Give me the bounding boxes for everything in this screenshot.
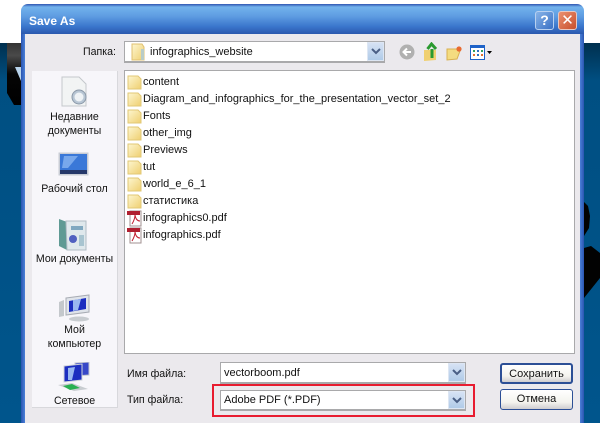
recent label: Недавние bbox=[50, 111, 99, 123]
background: black shape left bbox=[7, 43, 21, 105]
my computer label bbox=[48, 324, 101, 350]
help button bbox=[535, 11, 554, 30]
folder: fonts bbox=[128, 110, 171, 124]
red highlight box bbox=[212, 384, 475, 417]
recent label: документы bbox=[48, 124, 101, 136]
file name label: Имя файла: bbox=[127, 368, 186, 380]
window title: Save As bbox=[29, 14, 75, 28]
my computer label: Мой bbox=[64, 324, 85, 336]
file: infographics0.pdf bbox=[127, 210, 227, 226]
file type field bbox=[220, 390, 466, 411]
icon: new folder bbox=[447, 46, 462, 60]
icon: combo folder bbox=[132, 44, 144, 60]
icon: desktop bbox=[58, 152, 88, 176]
folder: previews bbox=[128, 144, 188, 158]
places bar bbox=[32, 71, 118, 408]
folder: world: world_e_6_1 bbox=[143, 178, 206, 190]
cancel button: Отмена bbox=[517, 393, 556, 405]
help button: ? bbox=[540, 12, 549, 28]
icon: up folder bbox=[424, 44, 436, 61]
icon: my computer bbox=[59, 294, 90, 322]
folder: content: content bbox=[143, 76, 179, 88]
icon: back bbox=[400, 44, 414, 60]
file: infographics0.pdf: infographics0.pdf bbox=[143, 212, 227, 224]
folder: diagram set: Diagram_and_infographics_for_the_presentation_vector_set_2 bbox=[143, 93, 451, 105]
left border bbox=[21, 34, 25, 423]
icon: network bbox=[58, 362, 90, 391]
folder: previews: Previews bbox=[143, 144, 188, 156]
folder combo text: infographics_website bbox=[150, 46, 253, 58]
save button: Сохранить bbox=[509, 368, 564, 380]
folder: statistics bbox=[128, 194, 198, 208]
folder: tut: tut bbox=[143, 161, 155, 173]
icon: my documents bbox=[59, 219, 86, 250]
icon: recent documents bbox=[62, 76, 86, 106]
folder: content bbox=[128, 76, 179, 90]
my computer label: компьютер bbox=[48, 338, 101, 350]
toolbar icons bbox=[400, 42, 492, 61]
network label: Сетевое bbox=[54, 395, 95, 407]
title bar bbox=[21, 4, 584, 34]
my documents label: Мои документы bbox=[36, 253, 113, 265]
folder: world bbox=[128, 178, 206, 192]
close button bbox=[558, 11, 577, 30]
recent label bbox=[48, 111, 101, 136]
file type arrow bbox=[448, 391, 465, 409]
file: infographics.pdf: infographics.pdf bbox=[143, 229, 221, 241]
cancel button bbox=[500, 389, 573, 410]
file name arrow bbox=[448, 363, 465, 382]
folder combo bbox=[124, 41, 385, 63]
background: black shape right bbox=[584, 202, 600, 298]
file name value: vectorboom.pdf bbox=[224, 367, 300, 379]
combo arrow bbox=[367, 42, 384, 61]
file type label: Тип файла: bbox=[127, 394, 183, 406]
folder: fonts: Fonts bbox=[143, 110, 171, 122]
file name field bbox=[220, 362, 466, 384]
folder: statistics: статистика bbox=[143, 195, 198, 207]
folder: other_img: other_img bbox=[143, 127, 192, 139]
folder label: Папка: bbox=[83, 46, 116, 58]
file list bbox=[124, 70, 575, 354]
close button: ✕ bbox=[561, 12, 574, 29]
file type value: Adobe PDF (*.PDF) bbox=[224, 394, 321, 406]
file: infographics.pdf bbox=[127, 228, 221, 244]
desktop label: Рабочий стол bbox=[41, 183, 108, 195]
folder: other_img bbox=[128, 126, 192, 140]
file rows bbox=[127, 76, 451, 244]
save button bbox=[500, 363, 573, 384]
icon: views bbox=[470, 45, 492, 60]
folder: tut bbox=[128, 160, 156, 174]
right border bbox=[580, 34, 584, 423]
